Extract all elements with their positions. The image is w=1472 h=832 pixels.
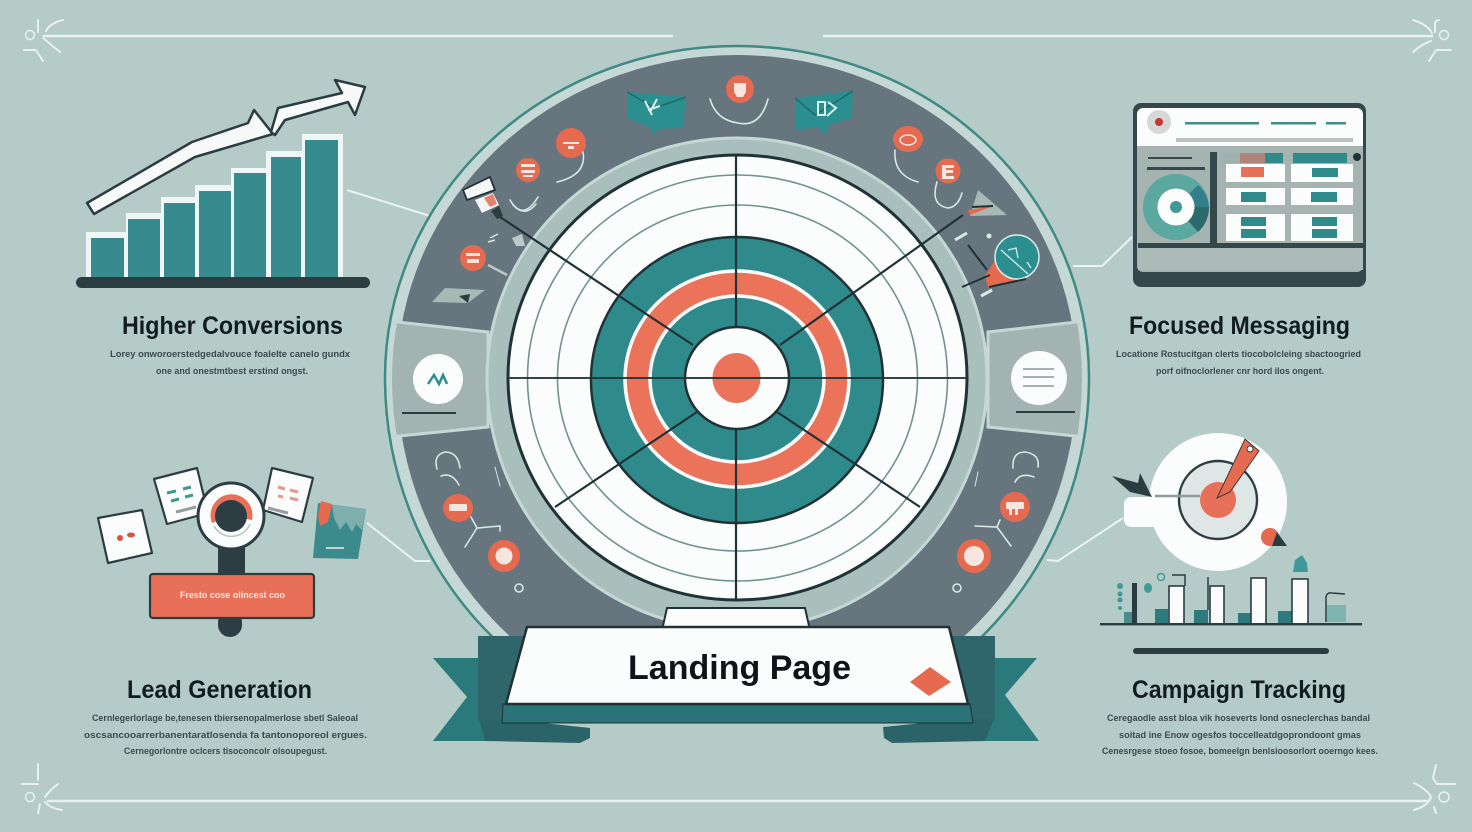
- icon: photo card: [313, 501, 366, 559]
- text block: soitad ine Enow ogesfos toccelleatdgoprondoont gmas: [1119, 730, 1361, 741]
- banner: white plate: [506, 627, 968, 704]
- panel: lead generation: [84, 468, 367, 757]
- text block: [110, 349, 351, 377]
- icon: small marks upper band: [432, 233, 992, 303]
- panel: campaign tracking: [1100, 433, 1378, 757]
- text block: [1102, 713, 1378, 757]
- inner ring: [487, 138, 987, 630]
- icon: badge glyphs: [449, 83, 1024, 566]
- banner: lower fold left: [478, 716, 590, 743]
- connector lines: [347, 190, 1132, 561]
- text block: Locatione Rostucitgan clerts tiocobolcleing sbactoogried: [1116, 349, 1361, 360]
- left side panel: [392, 321, 490, 438]
- banner: lower fold right: [883, 716, 995, 743]
- banner: right tail: [985, 658, 1039, 741]
- banner: under strip: [502, 704, 973, 723]
- text block: one and onestmtbest erstind ongst.: [156, 366, 308, 377]
- banner: top tab: [662, 608, 810, 630]
- button: Fresto cose olincest coo: [180, 590, 285, 600]
- arrow: growth trend: [87, 80, 365, 214]
- panel: focused messaging: [1116, 103, 1366, 377]
- cards grid: [1223, 153, 1361, 241]
- bar chart: rising bars: [76, 134, 370, 288]
- icon: right panel badge: [1011, 351, 1075, 412]
- icon: white curved strokes: [436, 99, 1038, 592]
- icon: top left pen: [463, 177, 503, 219]
- icon: top right pen: [968, 190, 1007, 216]
- text block: Cenesrgese stoeo fosoe, bomeelgn benlsioosorlort ooerngo kees.: [1102, 746, 1378, 757]
- grey icon band: [402, 55, 1072, 636]
- spokes: [497, 155, 963, 600]
- heading: Lead Generation: [127, 676, 312, 704]
- button: [150, 574, 314, 618]
- text block: porf oifnoclorlener cnr hord ilos ongent.: [1156, 366, 1324, 377]
- icon: left envelope: [627, 92, 686, 135]
- text block: Cernegorlontre oclcers tisoconcolr olsoupegust.: [124, 746, 327, 757]
- outer ring: [384, 44, 1090, 636]
- icon: right envelope: [795, 91, 853, 135]
- icon: salmon badges: [443, 75, 1030, 573]
- divider bar: [1133, 648, 1329, 654]
- text block: [84, 713, 367, 757]
- icon: megaphone: [962, 235, 1039, 288]
- bullseye: [685, 327, 789, 429]
- heading: Focused Messaging: [1129, 312, 1350, 340]
- icon: dashboard window: [1133, 103, 1366, 287]
- thin rings: [528, 175, 948, 581]
- heading: Higher Conversions: [122, 312, 343, 340]
- icon: floating cards: [98, 468, 313, 563]
- icon: dial target: [1112, 433, 1287, 571]
- bar chart: tracking bars: [1100, 555, 1362, 625]
- banner: back tabs: [478, 636, 538, 720]
- banner: [433, 608, 1039, 743]
- panel: higher conversions: [76, 80, 370, 377]
- frame: top right ornament and rule: [824, 20, 1451, 61]
- frame: bottom rule and ornaments: [22, 764, 1455, 813]
- text block: [1116, 349, 1361, 377]
- central wheel: [384, 44, 1090, 636]
- banner: diamond: [910, 667, 951, 696]
- chart: donut: [1143, 174, 1209, 240]
- heading: Campaign Tracking: [1132, 676, 1346, 704]
- target white disc: [508, 155, 967, 600]
- text block: Lorey onworoerstedgedalvouce foalelte canelo gundx: [110, 349, 351, 360]
- banner: left tail: [433, 658, 485, 741]
- icon: magnifier: [198, 483, 264, 637]
- right side panel: [986, 321, 1082, 438]
- text block: Ceregaodle asst bloa vik hoseverts lond osneclerchas bandal: [1107, 713, 1370, 724]
- target rings: [591, 237, 883, 523]
- horizontal spoke: [508, 377, 967, 379]
- text block: oscsancooarrerbanentaratlosenda fa tantonoporeol ergues.: [84, 730, 367, 741]
- text block: Cernlegerlorlage be,tenesen tbiersenopalmerlose sbetl Saleoal: [92, 713, 358, 724]
- banner: title: Landing Page: [628, 649, 851, 687]
- frame: top left ornament and rule: [24, 20, 672, 61]
- icon: left panel badge: [402, 354, 463, 413]
